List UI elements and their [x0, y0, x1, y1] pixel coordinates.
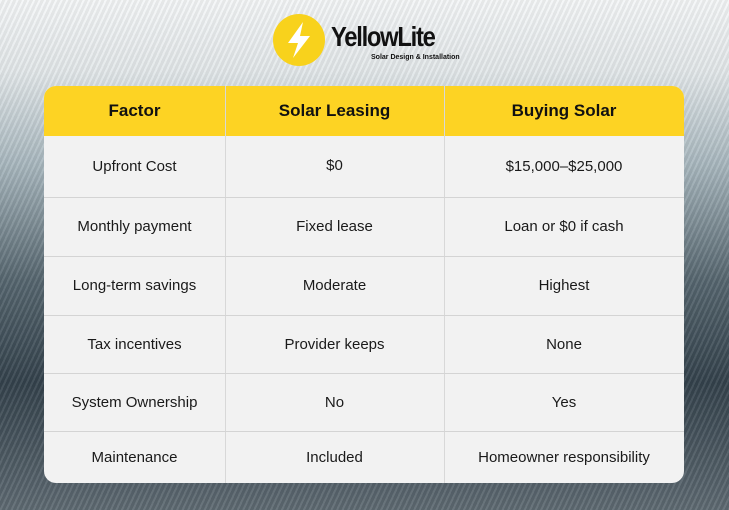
- logo: [273, 14, 460, 66]
- header row: [44, 86, 684, 136]
- row: long-term savings: Highest: [539, 277, 589, 294]
- row: system ownership: [72, 394, 576, 410]
- header row: Buying Solar: [512, 101, 616, 120]
- row: monthly payment: Loan or $0 if cash: [504, 218, 624, 235]
- row: upfront cost: Upfront Cost: [92, 158, 177, 175]
- row: tax incentives: Provider keeps: [284, 336, 385, 352]
- header row: Solar Leasing: [279, 101, 390, 120]
- icon: bolt circle: [273, 14, 325, 66]
- row: maintenance: Homeowner responsibility: [478, 448, 650, 466]
- row: system ownership: System Ownership: [72, 394, 197, 410]
- row: maintenance: [92, 448, 650, 466]
- row: long-term savings: Moderate: [303, 277, 366, 294]
- row: maintenance: Maintenance: [92, 448, 177, 466]
- row: upfront cost: [92, 156, 622, 175]
- row: tax incentives: [87, 336, 582, 352]
- row: long-term savings: Long-term savings: [73, 277, 196, 294]
- brand name: YellowLite: [331, 21, 435, 52]
- comparison table: [44, 86, 684, 483]
- row: long-term savings: [73, 277, 590, 294]
- tagline: Solar Design & Installation: [371, 54, 460, 61]
- row: upfront cost: $0: [326, 156, 343, 174]
- row: upfront cost: $15,000–$25,000: [506, 158, 622, 175]
- row: monthly payment: Fixed lease: [296, 218, 373, 235]
- row: monthly payment: Monthly payment: [77, 218, 192, 235]
- row: tax incentives: Tax incentives: [87, 336, 182, 352]
- row: tax incentives: None: [546, 336, 582, 352]
- row: system ownership: Yes: [552, 394, 576, 410]
- row: maintenance: Included: [306, 448, 363, 466]
- header row: Factor: [109, 101, 160, 120]
- row: system ownership: No: [325, 394, 344, 410]
- row: monthly payment: [77, 218, 624, 235]
